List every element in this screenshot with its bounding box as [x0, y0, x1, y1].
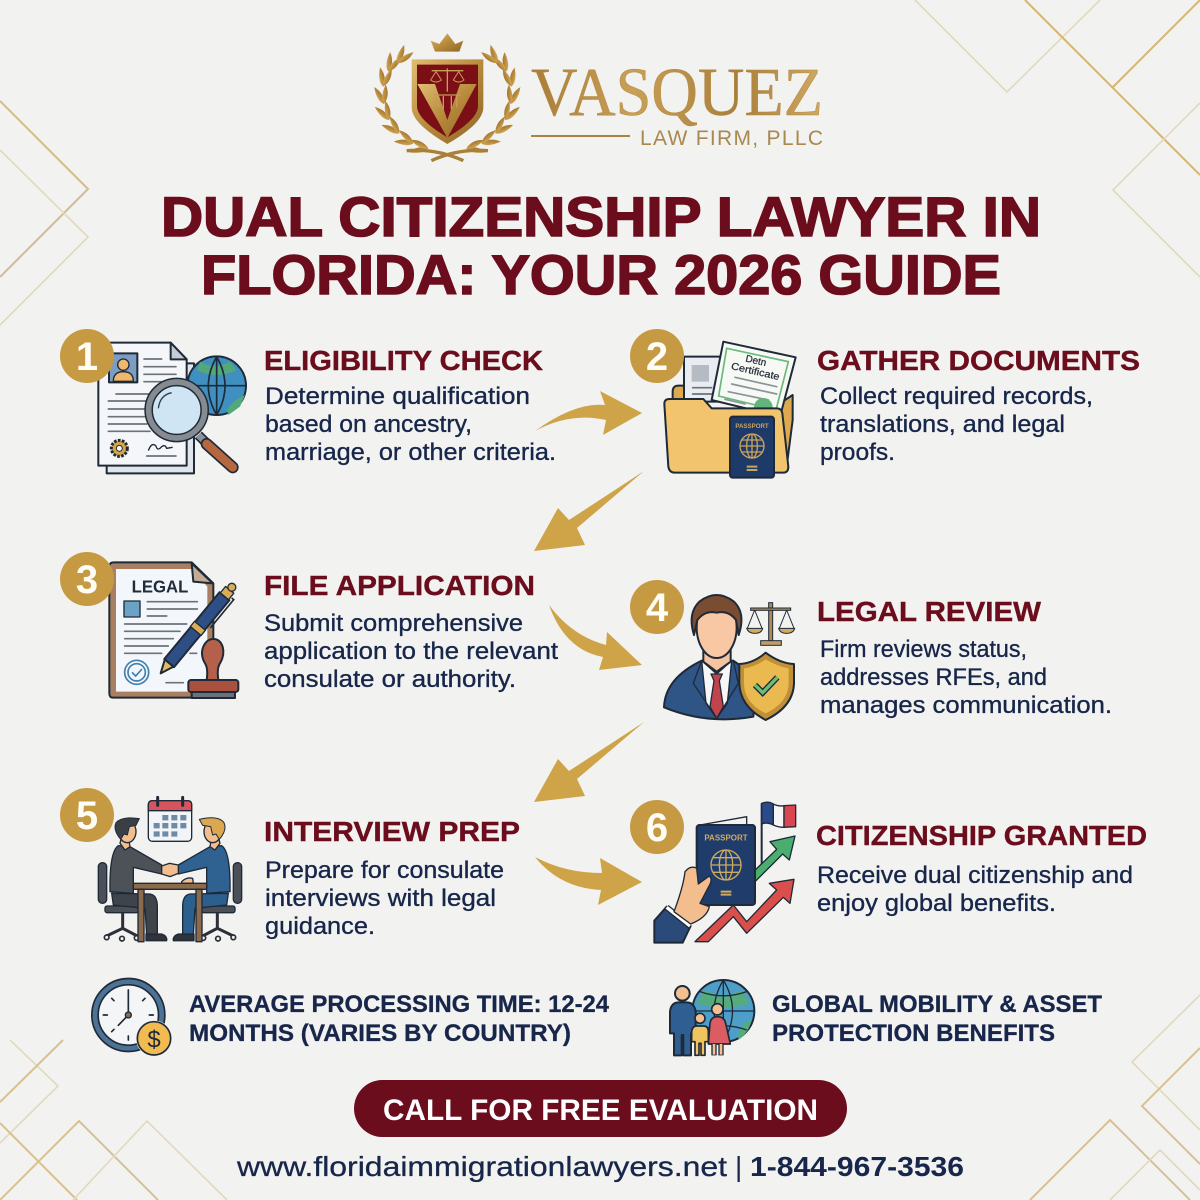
call to action button: CALL FOR FREE EVALUATION [383, 1094, 818, 1127]
icon: document with magnifier and globe [98, 343, 246, 473]
description: guidance. [265, 913, 375, 940]
icon: legal document with pen and stamp: LEGAL [132, 576, 189, 596]
arrow: step 4 to 5 [534, 722, 644, 802]
panel: step 6 citizenship granted [630, 800, 1147, 943]
icon: clock with dollar coin: $ [147, 1026, 161, 1053]
heading: GATHER DOCUMENTS [817, 345, 1140, 376]
description [820, 636, 1112, 719]
icon: lawyer with scales and shield [664, 595, 795, 720]
number badge 1: 1 [76, 335, 98, 379]
title [161, 185, 1041, 306]
number badge 5: 5 [76, 794, 98, 838]
processing time text: AVERAGE PROCESSING TIME: 12-24 [189, 991, 610, 1018]
icon: handshake meeting with calendar [98, 797, 242, 942]
panel: step 1 eligibility check [60, 329, 556, 473]
arrow: step 1 to 2 [535, 391, 642, 435]
icon: folder with certificate and passport: Detn [744, 354, 767, 369]
logo wordmark: VASQUEZ [531, 54, 823, 130]
description: translations, and legal [820, 411, 1065, 438]
description: Prepare for consulate [265, 857, 504, 884]
global mobility text [772, 991, 1102, 1047]
icon: legal document with pen and stamp [109, 562, 242, 698]
description: consulate or authority. [264, 666, 516, 693]
arrow: step 5 to 6 [535, 857, 642, 905]
processing time text [189, 991, 610, 1047]
icon: folder with certificate and passport: PASSPORT [735, 424, 769, 430]
description [265, 383, 556, 466]
icon: folder with certificate and passport [664, 342, 796, 478]
heading: CITIZENSHIP GRANTED [816, 820, 1147, 851]
description: Firm reviews status, [820, 636, 1027, 663]
description: marriage, or other criteria. [265, 439, 556, 466]
heading: ELIGIBILITY CHECK [264, 345, 543, 376]
logo emblem [373, 33, 521, 161]
logo: Vasquez Law Firm [373, 33, 823, 161]
heading: FILE APPLICATION [264, 570, 535, 601]
heading: LEGAL REVIEW [817, 596, 1042, 627]
contact line: www.floridaimmigrationlawyers.net [236, 1151, 727, 1182]
description: enjoy global benefits. [817, 890, 1056, 917]
number badge 5 [60, 788, 114, 842]
global mobility text: GLOBAL MOBILITY & ASSET [772, 991, 1102, 1018]
title: FLORIDA: YOUR 2026 GUIDE [201, 243, 1001, 306]
contact line: 1-844-967-3536 [750, 1151, 964, 1182]
icon: passport with flag and growth arrows [654, 802, 796, 943]
description: addresses RFEs, and [820, 664, 1047, 691]
description: interviews with legal [265, 885, 496, 912]
description: application to the relevant [264, 638, 558, 665]
title: DUAL CITIZENSHIP LAWYER IN [161, 185, 1041, 248]
call to action button [354, 1080, 847, 1137]
panel: step 3 file application [60, 552, 558, 698]
heading: INTERVIEW PREP [264, 816, 520, 847]
description: Determine qualification [265, 383, 530, 410]
callout: global mobility [670, 980, 1102, 1055]
number badge 3 [60, 552, 114, 606]
number badge 2 [630, 329, 684, 383]
number badge 1 [60, 329, 114, 383]
description: manages communication. [820, 692, 1112, 719]
icon: family with globe [670, 980, 754, 1055]
arrow: step 3 to 4 [549, 605, 642, 670]
description [264, 610, 558, 693]
contact line [236, 1151, 964, 1182]
icon: folder with certificate and passport: Certificate [730, 361, 781, 383]
panel: step 4 legal review [630, 580, 1112, 720]
processing time text: MONTHS (VARIES BY COUNTRY) [189, 1020, 571, 1047]
description [817, 862, 1133, 917]
number badge 6 [630, 800, 684, 854]
description [820, 383, 1093, 466]
callout: processing time [95, 982, 610, 1056]
arrow: step 2 to 3 [534, 471, 644, 551]
number badge 6: 6 [646, 806, 668, 850]
number badge 4: 4 [646, 586, 669, 630]
global mobility text: PROTECTION BENEFITS [772, 1020, 1055, 1047]
panel: step 5 interview prep [60, 788, 520, 942]
number badge 4 [630, 580, 684, 634]
number badge 2: 2 [646, 335, 668, 379]
description: proofs. [820, 439, 895, 466]
description: Collect required records, [820, 383, 1093, 410]
description: Submit comprehensive [264, 610, 523, 637]
description: Receive dual citizenship and [817, 862, 1133, 889]
description [265, 857, 504, 940]
number badge 3: 3 [76, 558, 98, 602]
description: based on ancestry, [265, 411, 472, 438]
panel: step 2 gather documents [630, 329, 1140, 478]
icon: passport with flag and growth arrows: PASSPORT [704, 834, 748, 843]
crown [431, 33, 463, 52]
contact line: | [735, 1151, 742, 1182]
logo subtitle: LAW FIRM, PLLC [640, 127, 823, 150]
icon: clock with dollar coin [95, 982, 171, 1056]
